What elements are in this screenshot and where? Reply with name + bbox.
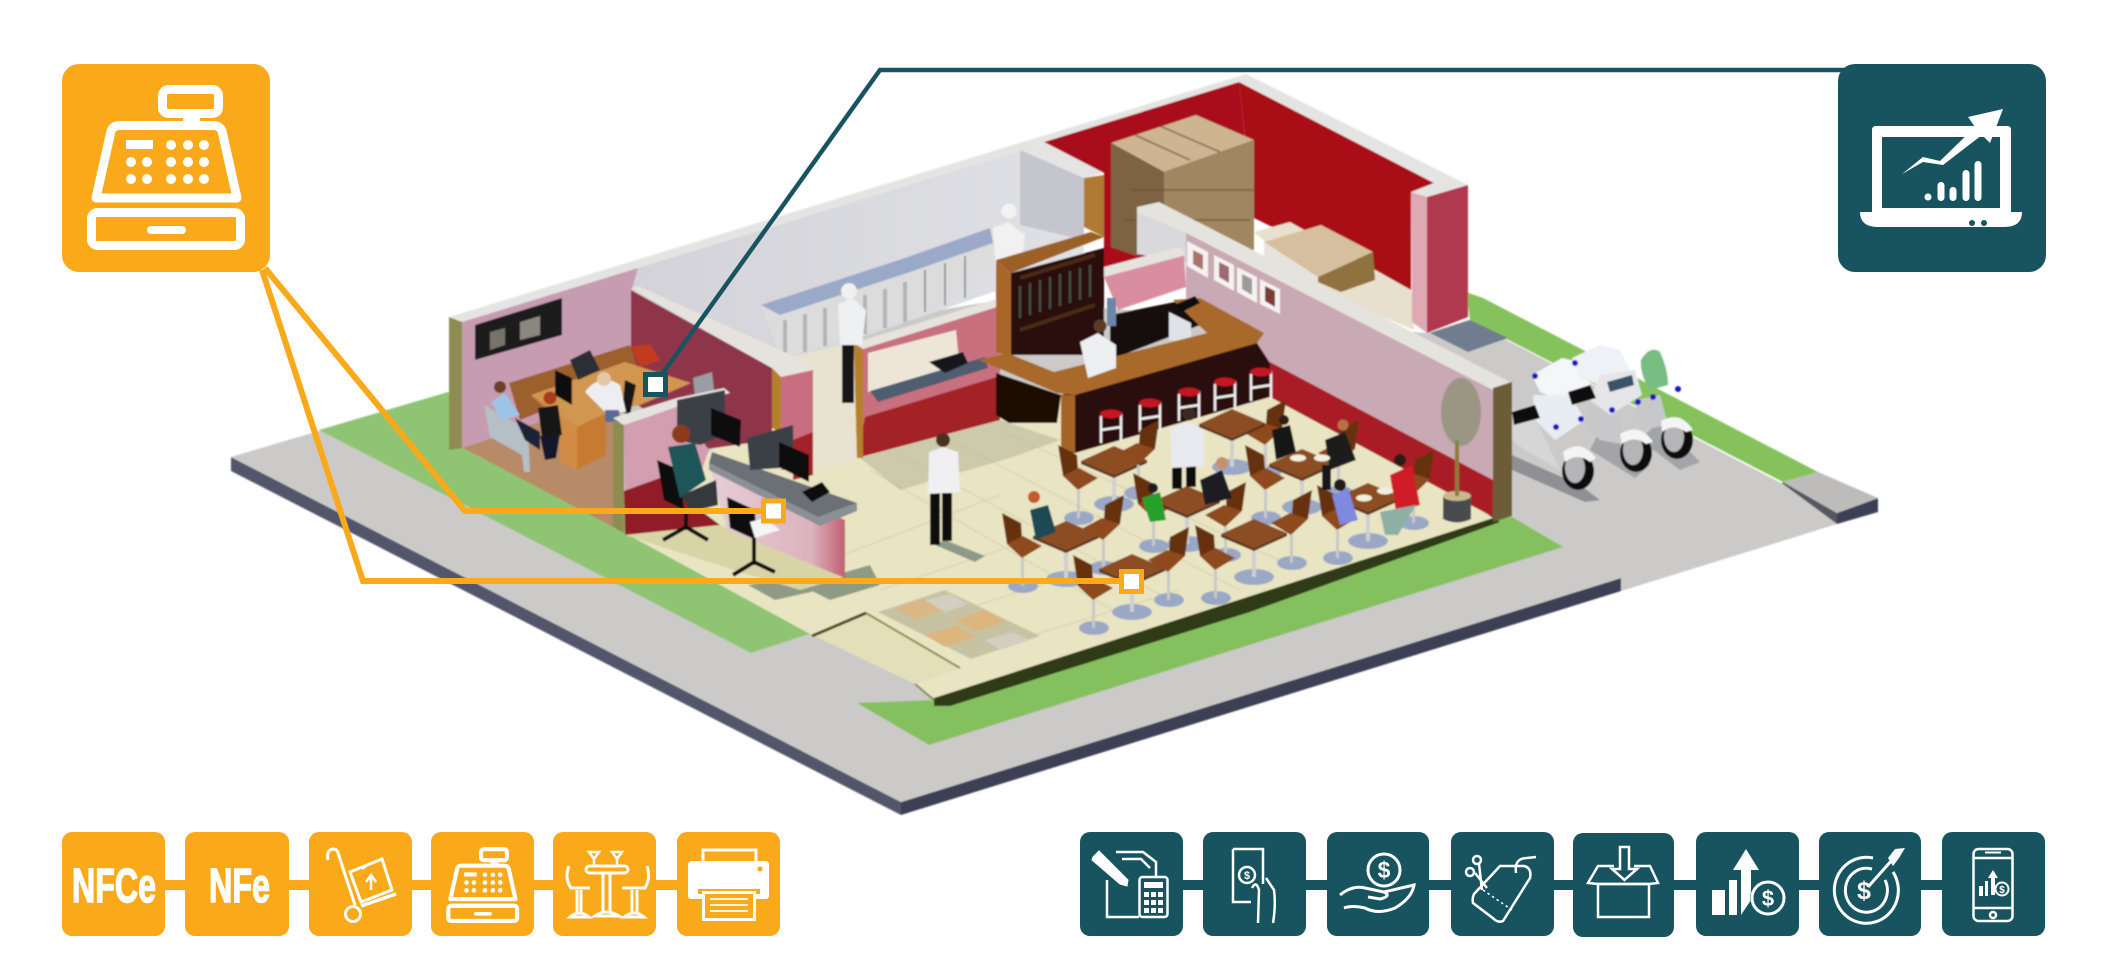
icon: box with arrow down — [1588, 847, 1658, 917]
entrance step — [812, 613, 960, 684]
lawn: front strip — [857, 517, 1563, 745]
woman blue — [1332, 488, 1358, 525]
pink side wall — [1104, 253, 1186, 310]
reception wall — [613, 388, 730, 535]
isometric restaurant floor plan — [231, 74, 1878, 815]
storage room back wall — [1044, 82, 1254, 270]
bike shadows — [1512, 455, 1600, 502]
door frame — [772, 368, 781, 432]
register on bar — [1174, 296, 1200, 312]
bike frames — [1512, 408, 1560, 470]
connector: orange lines from cash register panel — [262, 268, 1131, 581]
panel: small cash register — [431, 832, 534, 936]
office furniture — [484, 344, 714, 472]
receptionist — [657, 425, 718, 540]
stack — [693, 372, 714, 396]
shadows near reception — [748, 565, 880, 600]
chairs for visitors — [484, 405, 530, 472]
office side wall top — [631, 286, 813, 378]
long wall red band — [1270, 362, 1493, 517]
printer — [570, 350, 600, 380]
parking mat — [1430, 320, 1508, 352]
monitor — [555, 370, 572, 405]
second chair — [727, 497, 780, 575]
paved ground — [231, 300, 1837, 802]
bike rear bodies — [1533, 395, 1585, 440]
bar shelf — [1011, 248, 1104, 355]
kitchen counters — [761, 228, 995, 360]
dining tables and chairs — [1002, 400, 1434, 635]
panel: target with dart — [1819, 832, 1921, 936]
panel: smartphone — [1942, 832, 2045, 936]
icon: coin above open hand: $ — [1378, 857, 1391, 883]
chef 1 — [838, 283, 866, 403]
kitchen back wall — [631, 150, 1084, 368]
marker: reception — [764, 501, 784, 521]
icon: cash register — [448, 849, 517, 921]
connector bar: teal icon row — [1175, 880, 1950, 890]
long wall top — [1137, 202, 1510, 390]
man black — [1325, 432, 1356, 470]
office side wall — [631, 290, 772, 450]
office back wall — [462, 268, 638, 448]
panel: hand truck — [309, 832, 412, 936]
storage room right wall — [1239, 82, 1434, 295]
kitchen side wall shading — [1020, 150, 1084, 240]
panel: NFCe — [62, 832, 165, 936]
right pillar — [1411, 185, 1468, 333]
icon: cash register — [92, 90, 240, 246]
panel: reports laptop — [1838, 64, 2046, 272]
floor tile lines — [830, 430, 1300, 650]
parking curb — [1783, 472, 1878, 513]
wall end — [1493, 382, 1512, 522]
man in suit seat — [1200, 470, 1232, 505]
office wall panel — [475, 298, 562, 360]
bar counter top — [979, 298, 1264, 395]
lawn: back strip — [1466, 292, 1818, 482]
base slab sides — [231, 457, 1878, 815]
icon: hand truck with box — [328, 849, 396, 922]
desk back panel — [509, 345, 640, 420]
building front shadow — [934, 515, 1500, 706]
storage floor — [1254, 222, 1414, 330]
main floor — [625, 360, 1493, 698]
icon: hand holding banknote: $ — [1244, 870, 1250, 882]
woman visitor — [538, 392, 562, 460]
icon: phone with chart: $ — [1999, 885, 2005, 896]
bartender — [1080, 320, 1116, 378]
reception floor — [625, 525, 845, 590]
pallet of boxes — [1111, 115, 1254, 260]
lawn: left strip — [319, 392, 812, 653]
connector bar: orange icon row — [160, 880, 685, 890]
windscreen — [1641, 350, 1668, 390]
icon: target and dollar: $ — [1857, 877, 1871, 905]
wheels — [1562, 452, 1594, 490]
marker: dining room — [1122, 572, 1142, 592]
bike top cases — [1532, 358, 1590, 400]
reception counter front — [709, 463, 845, 578]
man in red — [1390, 465, 1420, 512]
long dining wall face — [1186, 233, 1493, 480]
bar inner — [1110, 302, 1200, 360]
office wall end — [449, 317, 462, 450]
fridge — [1169, 312, 1191, 343]
panel: NFe: NFe — [209, 860, 270, 913]
marker: office — [646, 374, 666, 394]
office floor — [463, 395, 620, 530]
bar stools — [1100, 368, 1272, 443]
plates — [1290, 454, 1306, 462]
kitchen partition — [854, 298, 1000, 458]
wooden door — [1084, 175, 1104, 237]
child in green — [1142, 492, 1166, 522]
panel: calculator and pencil — [1080, 832, 1183, 936]
panel: money in hand — [1203, 832, 1306, 936]
blue lights — [1532, 360, 1681, 430]
bottle cooler — [1107, 298, 1116, 326]
desk top — [531, 362, 691, 427]
woman black — [1272, 425, 1296, 460]
panel: NFe — [185, 832, 289, 936]
panel: growth chart with coin — [1696, 832, 1799, 936]
column — [781, 370, 813, 470]
icon: bars, arrow and coin: $ — [1762, 886, 1774, 911]
reception computers — [677, 390, 857, 526]
potted plant — [1441, 378, 1481, 522]
man visitor — [491, 381, 540, 450]
icon: calculator, pencil and documents — [1092, 851, 1168, 917]
icon: price tag being cut — [1466, 856, 1536, 922]
man at desk — [585, 372, 636, 422]
icon: bar table with stools — [567, 852, 649, 917]
icon: printer — [688, 850, 769, 921]
panel: table and chairs — [553, 832, 656, 936]
small boxes — [1264, 225, 1375, 292]
back wall top — [449, 74, 1468, 322]
panel: printer — [677, 832, 780, 936]
red box — [631, 344, 660, 367]
storage wall inner return — [1137, 210, 1186, 262]
waiter centre — [928, 433, 985, 562]
chef 2 — [993, 204, 1025, 272]
entrance rug — [878, 590, 1040, 659]
icon: laptop with rising chart — [1860, 109, 2022, 227]
diners — [1028, 415, 1420, 540]
panel: coin over hand — [1327, 832, 1429, 936]
man teal left table — [1030, 505, 1056, 540]
framed pictures — [1187, 241, 1280, 314]
kitchen door floor — [781, 340, 860, 472]
desk pedestal — [577, 413, 606, 470]
panel: open box — [1573, 833, 1674, 937]
bar — [979, 232, 1270, 453]
panel: price tag and scissors — [1451, 832, 1554, 936]
waiter dining — [1170, 408, 1204, 489]
panel: cash register — [62, 64, 270, 272]
connector: teal line from reports panel — [655, 70, 1850, 384]
bar base — [1061, 343, 1270, 453]
motorcycles — [1512, 345, 1700, 502]
panel: NFCe: NFCe — [72, 860, 156, 913]
